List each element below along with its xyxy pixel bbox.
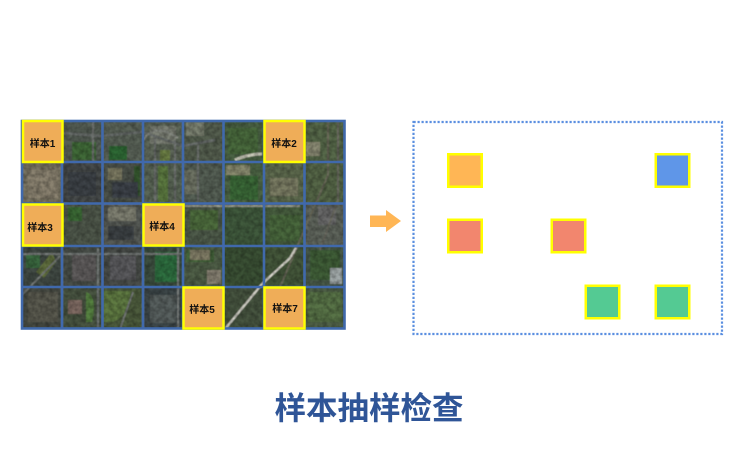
sample 1	[23, 121, 62, 162]
dotted border	[414, 122, 722, 334]
sample 1: 样本1	[30, 137, 56, 150]
row 2	[23, 163, 61, 202]
selected sample: blue	[656, 154, 689, 187]
buildings and light patches	[28, 170, 58, 198]
panel: aerial map grid	[21, 120, 345, 329]
grid lines	[21, 120, 345, 329]
arrow	[370, 210, 401, 232]
row 5	[24, 288, 60, 327]
title: 样本抽样检查	[274, 390, 464, 426]
green patches	[72, 142, 96, 160]
selected sample: orange	[448, 154, 482, 187]
selected sample: green right	[656, 286, 689, 318]
sample 4	[144, 204, 184, 246]
row 1	[64, 122, 101, 160]
selected sample: red middle	[552, 220, 585, 252]
selected sample: green left	[586, 286, 619, 318]
sample 2	[264, 121, 304, 162]
sample 3: 样本3	[27, 221, 53, 234]
sample 5	[184, 288, 224, 328]
panel: selected samples	[414, 122, 722, 334]
row 3	[62, 203, 103, 246]
sample 5: 样本5	[189, 303, 215, 316]
sample 7: 样本7	[272, 302, 298, 315]
selected sample: red left	[448, 220, 482, 252]
sample 3	[23, 204, 62, 246]
row 4	[24, 248, 60, 286]
roads	[62, 132, 215, 146]
sample 2: 样本2	[271, 137, 297, 150]
aerial imagery	[21, 120, 345, 329]
sample 7	[264, 288, 304, 328]
sample 4: 样本4	[149, 220, 175, 233]
